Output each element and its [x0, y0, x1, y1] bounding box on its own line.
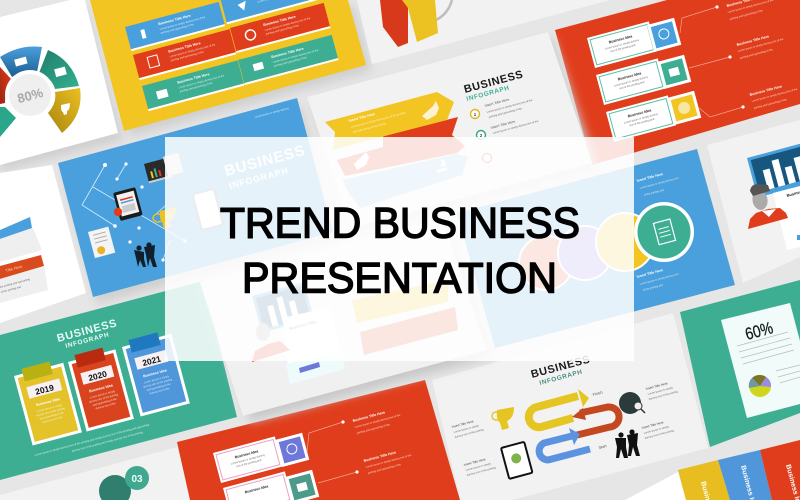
chart ghost	[252, 282, 314, 333]
row: red right: Lorem Ipsum is simply dummy text of the	[264, 16, 311, 32]
row: teal left: printing and typesetting of the	[179, 81, 214, 93]
footer caption: dummy text of the printing and simply dummy text of the printing	[71, 430, 144, 453]
slide: yellow business rows	[90, 0, 372, 137]
right texts	[726, 0, 798, 110]
card 2: Business Idea	[617, 71, 643, 81]
card 2: text of the printing and	[619, 80, 645, 90]
red arrow	[572, 407, 619, 435]
slide: white man ghost	[200, 218, 492, 422]
year card 2020: dummy text of the	[95, 401, 117, 410]
insert title texts: Insert Title Here	[641, 420, 664, 430]
insert title texts: dummy text of the printing	[454, 427, 485, 439]
yellow ribbon	[325, 92, 454, 150]
yellow arrow	[529, 389, 589, 427]
year card 2020: Business Idea	[89, 383, 114, 393]
year card 2019	[13, 358, 82, 446]
year card 2019: dummy text of the	[42, 415, 64, 424]
card 3: Lorem Ipsum is simply dummy	[623, 112, 659, 125]
laptop	[143, 153, 184, 183]
connector lines	[680, 7, 743, 117]
row: red right	[230, 3, 330, 53]
row: red left: printing and typesetting of the	[170, 50, 205, 62]
dark circle	[99, 475, 131, 500]
right texts: Business Title Here	[749, 84, 782, 97]
year card 2020: dummy text of the printing	[89, 392, 119, 404]
network lines	[82, 164, 185, 260]
year card 2019: 2019	[34, 382, 55, 397]
figure arc	[436, 0, 452, 20]
paper lines	[737, 332, 800, 383]
connector dots	[715, 5, 745, 109]
icon square 2	[285, 470, 319, 500]
slide: man and chart right	[707, 120, 800, 283]
bottom text: Insert Title Here	[636, 268, 663, 279]
card 3	[606, 95, 676, 142]
tag icon	[422, 101, 439, 120]
person ghost	[252, 323, 290, 362]
year card 2020: 2020	[87, 368, 108, 383]
insert title texts: Insert Title Here	[463, 457, 486, 467]
row: blue left	[125, 2, 225, 51]
insert title texts: Insert Title Here	[451, 419, 474, 429]
row: teal right: Lorem Ipsum is simply dummy text of the	[272, 48, 319, 64]
top text	[636, 172, 679, 197]
list items: Lorem Ipsum is simply dummy text of the	[486, 98, 533, 114]
yellow circle	[596, 213, 654, 271]
card lines	[0, 277, 31, 294]
dots	[341, 420, 359, 474]
top text: Insert Title Here	[636, 172, 663, 183]
card 1: text of the printing and	[236, 458, 262, 468]
year card 2021: and typesetting of the	[146, 382, 172, 392]
year card 2020: and typesetting of the	[92, 397, 118, 407]
ribbon text: Insert Title Here	[348, 112, 375, 123]
red figure	[380, 0, 408, 47]
list items: Insert Title Here	[490, 120, 516, 130]
red bar	[0, 255, 44, 279]
tablet	[501, 442, 532, 479]
insert title texts: dummy text of the printing	[648, 389, 679, 401]
row: teal right	[238, 35, 338, 85]
year card 2019: Lorem Ipsum is simply	[36, 402, 63, 413]
row: red right: Business Title Here	[263, 15, 296, 27]
blue arrow	[539, 428, 590, 460]
red ribbon	[337, 117, 465, 176]
card 1: text of the printing and	[610, 43, 636, 53]
Start label: Start	[598, 444, 608, 450]
icon square 2	[657, 55, 691, 89]
blue bar	[0, 217, 32, 239]
insert title texts: Lorem Ipsum is simply	[465, 461, 492, 472]
right texts: printing and typesetting of the	[739, 47, 774, 60]
row: teal right: printing and typesetting of the	[273, 55, 308, 68]
ribbon text: and typesetting of the printing	[352, 121, 387, 134]
slide: red cards top right	[555, 0, 800, 165]
card button	[797, 235, 800, 240]
card 2: Lorem Ipsum is simply dummy	[613, 75, 649, 88]
card lines: the printing and typesetting	[0, 277, 31, 289]
top note: Lorem Ipsum is simply dummy	[254, 106, 290, 119]
row: teal left	[142, 60, 244, 111]
heading: INFOGRAPH	[539, 369, 583, 387]
year card 2019: dummy text of the printing	[36, 406, 66, 418]
form title: Business Title	[289, 319, 317, 331]
ribbon text: Lorem Ipsum is simply dummy text of the printing	[350, 110, 406, 129]
panel: translucent title overlay	[165, 137, 634, 361]
footer caption: Lorem Ipsum is simply dummy text of the printing and simply dummy text of the printing and typesetting	[34, 422, 150, 457]
year card 2021: dummy text of the	[149, 386, 171, 395]
right text: Business Title Here	[363, 450, 396, 463]
insert title texts: Lorem Ipsum is simply	[647, 385, 674, 396]
list items: 1	[474, 112, 477, 117]
slide: coloured bands bottom right	[625, 440, 800, 500]
right text: printing and typesetting of the	[356, 422, 391, 435]
heading: BUSINESS	[56, 317, 119, 345]
row: red left: Business Title Here	[168, 41, 201, 54]
card 3: Business Idea	[627, 108, 653, 118]
slide: ribbons centre	[307, 32, 597, 234]
insert title texts: Insert Title Here	[645, 381, 668, 391]
tablet	[113, 187, 143, 221]
card 3: text of the printing and	[629, 117, 655, 127]
list items: Lorem Ipsum is simply dummy text of the	[492, 119, 539, 135]
form bottom tint	[286, 350, 345, 384]
icon square 1	[647, 18, 681, 52]
man	[748, 184, 788, 229]
insert title texts: Lorem Ipsum is simply	[643, 424, 670, 435]
donut centre 80%	[5, 70, 55, 120]
heading: Business Infograph: BUSINESS	[463, 69, 525, 96]
slide: white text left	[0, 165, 86, 323]
number 03: 03	[131, 474, 143, 485]
row: teal left: Business Title Here	[177, 72, 210, 85]
list items: Insert Title Here	[484, 98, 510, 108]
chart frame	[747, 143, 800, 198]
right text: Lorem Ipsum is simply dummy text of the	[365, 453, 412, 469]
slide: teal year cards	[0, 281, 237, 480]
right texts: printing and typesetting of the	[729, 8, 764, 21]
slide: blue circles right	[457, 149, 735, 348]
row: red left	[133, 29, 236, 80]
year card 2020	[67, 344, 134, 432]
people	[615, 429, 640, 458]
heading: Business Infograph: INFOGRAPH	[466, 85, 510, 103]
document	[88, 227, 115, 258]
row: red left: Lorem Ipsum is simply dummy text of the	[169, 42, 216, 58]
row: teal left: Lorem Ipsum is simply dummy text of the	[178, 73, 225, 89]
teal document badge	[634, 202, 694, 262]
right texts: printing and typesetting of the	[753, 97, 788, 110]
donut centre 80%: 80%	[16, 85, 45, 106]
top text: of the printing and	[643, 188, 665, 197]
pie	[749, 375, 771, 397]
row: blue left: Lorem Ipsum is simply dummy text of the	[159, 15, 206, 31]
year card 2021: dummy text of the printing	[143, 377, 173, 389]
connectors	[307, 422, 357, 483]
yellow figure	[402, 0, 438, 42]
slide: blue network	[58, 98, 337, 304]
download icon ghost	[437, 159, 447, 173]
card 1	[587, 21, 657, 68]
grey card top	[0, 228, 42, 262]
slide heading: BUSINESS	[223, 142, 307, 180]
card 2	[223, 471, 293, 500]
lilac circle	[558, 226, 612, 280]
bottom text: Lorem Ipsum is simply dummy text	[639, 272, 679, 286]
row: red right: printing and typesetting of the	[265, 23, 300, 36]
card 1: Lorem Ipsum is simply dummy	[230, 453, 266, 466]
card 2	[596, 58, 666, 105]
list items: 2	[480, 133, 483, 138]
right text: Business Title Here	[352, 410, 385, 423]
heading: INFOGRAPH	[65, 331, 110, 350]
donut segments	[0, 46, 81, 137]
paper	[721, 303, 800, 418]
top text: Lorem Ipsum is simply dummy text	[639, 176, 679, 190]
insert title texts	[451, 381, 679, 477]
insert title texts: dummy text of the printing	[644, 428, 675, 440]
slide heading: INFOGRAPH	[228, 165, 290, 191]
row: blue left: printing and typesetting of the	[160, 22, 195, 35]
row: teal right: Business Title Here	[271, 47, 304, 59]
right texts: Lorem Ipsum is simply dummy text of the	[751, 87, 798, 103]
card lines: of the printing and	[0, 285, 22, 294]
number 03	[125, 466, 149, 490]
insert title texts: dummy text of the printing	[466, 465, 497, 477]
title	[220, 200, 580, 302]
60% label: 60%	[743, 318, 775, 344]
form button	[299, 362, 320, 373]
slide: donut chart	[0, 0, 124, 172]
slide: figures top	[357, 0, 610, 64]
right texts: Business Title Here	[736, 34, 769, 47]
yellow bar ghost	[352, 280, 448, 323]
bar label: Title Here	[5, 263, 24, 273]
document icon	[653, 219, 676, 245]
red badge	[114, 208, 122, 216]
bottom text: of the printing and	[642, 283, 664, 292]
donut icons	[14, 57, 70, 115]
icon square 1	[275, 433, 309, 467]
red tag ghost	[354, 152, 369, 170]
year card 2020: Lorem Ipsum is simply	[90, 389, 116, 399]
list items: printing and typesetting of the	[488, 106, 523, 119]
heading: BUSINESS	[530, 354, 592, 381]
right text: Lorem Ipsum is simply dummy text of the	[354, 413, 401, 429]
year card 2021: Lorem Ipsum is simply	[144, 374, 170, 384]
right text: printing and typesetting of the	[367, 462, 402, 475]
right text	[352, 410, 412, 475]
slide: bottom-left circles	[0, 447, 192, 500]
row: blue left: Business Title Here	[158, 14, 191, 26]
year card 2021	[121, 329, 190, 417]
slide: red cards bottom	[177, 380, 460, 500]
right texts: Lorem Ipsum is simply dummy text of the	[737, 37, 784, 53]
form card	[283, 307, 345, 384]
trophy	[153, 207, 176, 229]
white card	[773, 186, 800, 250]
year card 2021: Business Idea	[143, 368, 168, 378]
year card 2019: and typesetting of the	[39, 410, 65, 421]
bottom text	[636, 268, 679, 292]
icon square 3	[667, 91, 701, 125]
blue ribbon	[342, 154, 468, 208]
title: TREND BUSINESS	[220, 200, 580, 248]
slide: teal 60% paper	[680, 280, 800, 447]
card 1: Business Idea	[608, 34, 634, 44]
list items	[470, 98, 539, 162]
people icon	[134, 242, 157, 267]
title: PRESENTATION	[242, 256, 557, 302]
card 1: Business Idea	[234, 449, 260, 459]
globe	[619, 392, 645, 414]
pink circle	[519, 236, 573, 290]
insert title texts: Lorem Ipsum is simply	[453, 423, 480, 434]
year card 2021: 2021	[141, 353, 162, 368]
grey card bottom	[0, 266, 48, 303]
row: blue right	[221, 0, 321, 24]
red bar ghost	[360, 307, 458, 355]
card 1: Lorem Ipsum is simply dummy	[604, 38, 640, 51]
card 2: Business Idea	[244, 484, 270, 494]
slide: winding arrows	[432, 313, 708, 500]
trophy	[492, 407, 514, 430]
phone	[192, 189, 223, 230]
card 1	[213, 436, 283, 483]
network dots	[103, 162, 187, 262]
year card 2019: Business Idea	[36, 397, 61, 407]
Finish label: Finish	[592, 390, 603, 397]
